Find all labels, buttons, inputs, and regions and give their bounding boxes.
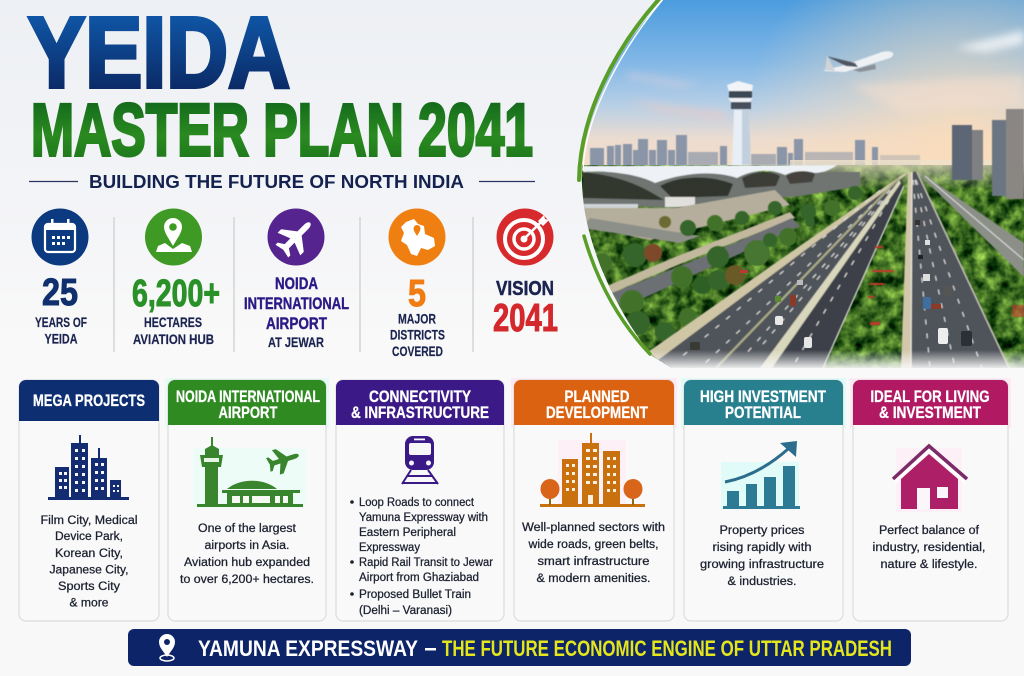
stat: Noida International Airport: NOIDA xyxy=(275,275,318,293)
panel header: NOIDA INTERNATIONAL xyxy=(176,388,320,406)
stat: 5 districts xyxy=(388,208,446,359)
horizon haze xyxy=(790,160,1024,190)
footer banner: YAMUNA EXPRESSWAY xyxy=(198,636,418,661)
panel header xyxy=(514,380,674,425)
body text: & modern amenities. xyxy=(536,571,650,585)
body text xyxy=(40,513,138,610)
clouds xyxy=(625,30,1024,120)
stat: Vision 2041: 2041 xyxy=(493,297,558,340)
stat: Noida International Airport: AT JEWAR xyxy=(268,334,324,350)
panel header xyxy=(19,380,159,421)
body text: One of the largest xyxy=(198,521,297,535)
trees xyxy=(592,186,862,342)
icon: map pin xyxy=(145,208,202,266)
bullet list xyxy=(350,495,493,617)
body text: & more xyxy=(70,596,109,610)
divider xyxy=(472,217,474,352)
subtitle: BUILDING THE FUTURE OF NORTH INDIA xyxy=(89,171,464,192)
body text: Perfect balance of xyxy=(879,523,980,537)
panel header: POTENTIAL xyxy=(725,404,801,422)
body text: & industries. xyxy=(728,574,796,588)
footer banner: THE FUTURE ECONOMIC ENGINE OF UTTAR PRADESH xyxy=(442,636,892,661)
stat: 5 districts: 5 xyxy=(408,273,426,315)
panel header xyxy=(684,380,843,425)
stat: 6,200+ hectares: AVIATION HUB xyxy=(133,331,214,347)
divider xyxy=(233,217,235,352)
icon: region map xyxy=(388,208,446,266)
stat: 25 years: YEIDA xyxy=(44,330,78,346)
panel: mega projects xyxy=(19,380,159,621)
panel header: IDEAL FOR LIVING xyxy=(870,388,990,406)
stat: Noida International Airport xyxy=(244,208,349,350)
icon: city buildings xyxy=(48,435,129,500)
stat: 25 years: YEARS OF xyxy=(35,314,87,330)
body text: Japanese City, xyxy=(50,562,128,576)
bottom fade xyxy=(651,350,1024,368)
bullet list: Rapid Rail Transit to Jewar xyxy=(359,555,493,569)
body text: growing infrastructure xyxy=(700,557,824,571)
stat: Noida International Airport: INTERNATIONAL xyxy=(244,295,349,313)
panel: ideal for living and investment xyxy=(850,378,1011,621)
control tower xyxy=(727,81,753,165)
ground base xyxy=(570,165,1024,370)
expressway right xyxy=(901,172,1024,368)
bullet list: Proposed Bullet Train xyxy=(359,587,471,601)
panel: connectivity and infrastructure xyxy=(336,380,504,621)
divider xyxy=(113,217,115,352)
icon: house xyxy=(893,446,967,512)
stat: 25 years: 25 xyxy=(42,272,78,314)
panel header: PLANNED xyxy=(564,388,630,406)
paved areas and local roads xyxy=(582,190,800,308)
stat: 5 districts: DISTRICTS xyxy=(390,326,445,342)
bullet list: Yamuna Expressway with xyxy=(359,510,488,524)
bullet list: Airport from Ghaziabad xyxy=(359,570,479,584)
airplane xyxy=(823,51,893,72)
bullet list: (Delhi – Varanasi) xyxy=(359,603,452,617)
panel header xyxy=(853,380,1008,425)
body text xyxy=(522,520,665,585)
body text: Well-planned sectors with xyxy=(522,520,665,534)
body text: Film City, Medical xyxy=(40,513,138,527)
panel: high investment potential xyxy=(681,378,846,621)
vehicles xyxy=(690,220,972,350)
terminal xyxy=(583,165,860,210)
panel header: DEVELOPMENT xyxy=(546,404,648,422)
icon: growth chart xyxy=(721,441,800,509)
body text: smart infrastructure xyxy=(538,554,650,568)
icon: location pin xyxy=(159,634,175,661)
expressway left xyxy=(648,172,906,368)
body text xyxy=(872,523,986,571)
panel header: CONNECTIVITY xyxy=(369,388,471,406)
body text: Sports City xyxy=(58,579,121,593)
stat: Vision 2041 xyxy=(493,208,558,340)
stat: 5 districts: MAJOR xyxy=(398,310,436,326)
title: Master Plan 2041: MASTER PLAN 2041 xyxy=(31,88,533,172)
body text: Device Park, xyxy=(55,529,123,543)
stat: 6,200+ hectares: 6,200+ xyxy=(132,273,220,315)
stat: 6,200+ hectares xyxy=(132,208,220,347)
panel header: & INVESTMENT xyxy=(879,404,981,422)
towers right xyxy=(952,109,1024,199)
panel header: AIRPORT xyxy=(218,404,278,422)
body text xyxy=(180,521,314,586)
stat: 5 districts: COVERED xyxy=(392,343,443,359)
panel header: HIGH INVESTMENT xyxy=(700,388,826,406)
red flowers xyxy=(868,246,1024,325)
body text: rising rapidly with xyxy=(712,540,812,554)
icon: train xyxy=(402,436,438,484)
panel header xyxy=(168,380,326,425)
panel: noida international airport xyxy=(165,378,329,621)
green arc xyxy=(579,0,664,354)
body text: nature & lifestyle. xyxy=(880,557,978,571)
icon: calendar xyxy=(32,208,88,266)
bullet list: Expressway xyxy=(359,540,421,554)
footer banner xyxy=(128,629,911,666)
stat: 25 years xyxy=(32,208,88,346)
body text: wide roads, green belts, xyxy=(528,537,658,551)
body text xyxy=(700,523,824,588)
body text: to over 6,200+ hectares. xyxy=(180,572,314,586)
title: YEIDA: YEIDA xyxy=(28,0,290,109)
icon: airport terminal and tower xyxy=(193,437,305,508)
stat: Vision 2041: VISION xyxy=(496,278,554,300)
icon: buildings and trees xyxy=(540,433,645,507)
body text: industry, residential, xyxy=(872,540,986,554)
icon: target xyxy=(496,208,554,266)
bullet list: Eastern Peripheral xyxy=(359,525,456,539)
panel header xyxy=(336,380,504,425)
stat: 6,200+ hectares: HECTARES xyxy=(144,314,202,330)
icon: plane xyxy=(268,208,324,266)
stat: Noida International Airport: AIRPORT xyxy=(266,315,327,333)
body text: airports in Asia. xyxy=(204,538,290,552)
skyline xyxy=(590,135,920,168)
bullet list: Loop Roads to connect xyxy=(359,495,475,509)
hero photo: airport and expressway xyxy=(570,0,1024,370)
panel header: MEGA PROJECTS xyxy=(33,392,145,410)
divider xyxy=(359,217,361,352)
body text: Property prices xyxy=(720,523,804,537)
body text: Korean City, xyxy=(55,546,123,560)
body text: Aviation hub expanded xyxy=(184,555,310,569)
panel: planned development xyxy=(511,378,677,621)
panel header: & INFRASTRUCTURE xyxy=(351,404,489,422)
